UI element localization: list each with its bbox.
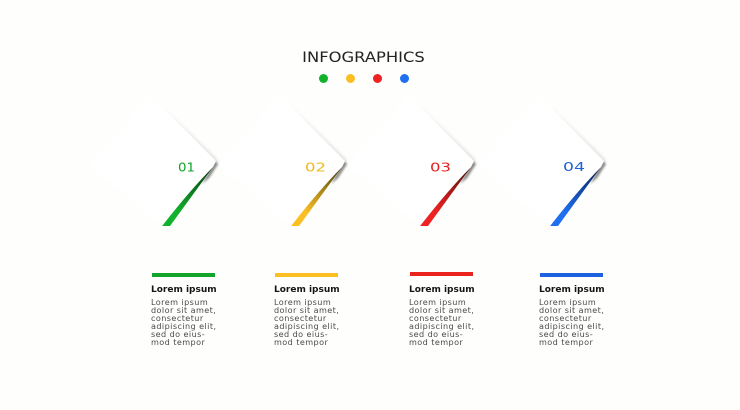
text block 02: consectetur [274,313,327,323]
text block 01: consectetur [151,313,204,323]
text block 04: mod tempor [539,337,593,347]
text block 02: Lorem ipsum [274,297,331,307]
number 02: 02 [305,160,326,174]
text block 04: sed do eius- [539,329,593,339]
text block 03: Lorem ipsum [409,297,466,307]
text block 04: adipiscing elit, [539,321,604,331]
text block 03: Lorem ipsum [409,285,475,295]
text block 03: sed do eius- [409,329,463,339]
card 03 [348,95,476,226]
text block 04: Lorem ipsum [539,297,596,307]
card 02 [219,95,347,226]
text block 01: Lorem ipsum [151,285,217,295]
card 01 [90,95,218,226]
text block 03 [409,272,475,347]
text block 04: consectetur [539,313,592,323]
text block 01: adipiscing elit, [151,321,216,331]
number 04: 04 [563,160,585,174]
text block 02: adipiscing elit, [274,321,339,331]
text block 01: mod tempor [151,337,205,347]
legend dots [319,74,409,83]
title: INFOGRAPHICS [302,49,425,66]
text block 04 [539,273,605,347]
text block 02 [274,273,340,347]
text block 02: dolor sit amet, [274,305,339,315]
text block 01 [151,273,217,347]
text block 01: dolor sit amet, [151,305,216,315]
text block 03: consectetur [409,313,462,323]
text block 02: sed do eius- [274,329,328,339]
text block 03: dolor sit amet, [409,305,474,315]
ribbon 04 [550,167,601,226]
number 03: 03 [430,160,451,174]
ribbon 02 [291,167,342,226]
card 04 [478,95,606,226]
text block 03: adipiscing elit, [409,321,474,331]
text block 01: Lorem ipsum [151,297,208,307]
text block 01: sed do eius- [151,329,205,339]
text block 03: mod tempor [409,337,463,347]
text block 02: Lorem ipsum [274,285,340,295]
number 01: 01 [178,160,195,174]
text block 04: dolor sit amet, [539,305,604,315]
text block 02: mod tempor [274,337,328,347]
ribbon 01 [162,167,213,226]
ribbon 03 [420,167,471,226]
text block 04: Lorem ipsum [539,285,605,295]
